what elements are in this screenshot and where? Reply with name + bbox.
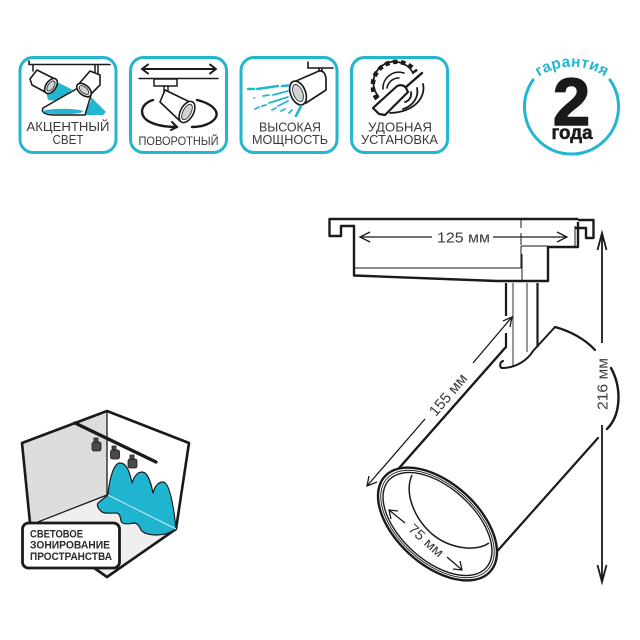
dimension: width 125 mm [360,230,567,246]
label: easy installation: УСТАНОВКА [361,132,438,147]
warranty years: года [552,123,593,144]
warranty badge [522,58,620,156]
dimension: height 216 mm: 216 мм [594,358,612,410]
label: accent light: СВЕТ [52,132,84,147]
panel: easy installation [352,58,448,152]
room caption: ЗОНИРОВАНИЕ [30,540,110,552]
dimension: width 125 mm: 125 мм [437,230,490,246]
spot lamps [92,438,137,468]
icon: spotlight with rays [248,62,333,116]
dimension: height 216 mm [594,233,612,582]
light zone shape [97,463,176,535]
room illustration [22,411,189,577]
dimension: length 155 mm [367,317,512,486]
icon: two spotlights with beams [29,61,110,115]
warranty number: 2 [553,65,590,140]
room caption: ПРОСТРАНСТВА [30,551,112,563]
label: high power [252,120,328,147]
warranty arc text: гарантия [536,58,608,76]
room caption [22,523,120,568]
front ring [357,446,518,602]
label: easy installation [361,120,438,147]
panel: high power [241,58,337,152]
rail [75,423,156,462]
track spotlight drawing [330,219,618,602]
cylinder body [393,327,618,557]
icon: rotating spotlight [139,64,218,130]
label: accent light [26,119,110,147]
dimension: diameter 75 mm [389,510,462,570]
inner reflector arc [409,475,489,548]
label: rotating: ПОВОРОТНЫЙ [138,135,218,148]
room caption: СВЕТОВОЕ [30,528,83,540]
track adapter [330,219,594,281]
dimension: length 155 mm: 155 мм [426,370,471,420]
label: high power: МОЩНОСТЬ [252,132,328,147]
icon: gear and screwdriver [373,62,423,115]
dimension: diameter 75 mm: 75 мм [405,520,447,560]
label: accent light: АКЦЕНТНЫЙ [26,119,110,134]
label: high power: ВЫСОКАЯ [259,120,321,134]
panel: rotating [130,58,226,152]
panel: accent light [20,58,116,152]
stem [506,283,538,366]
label: easy installation: УДОБНАЯ [368,120,432,134]
